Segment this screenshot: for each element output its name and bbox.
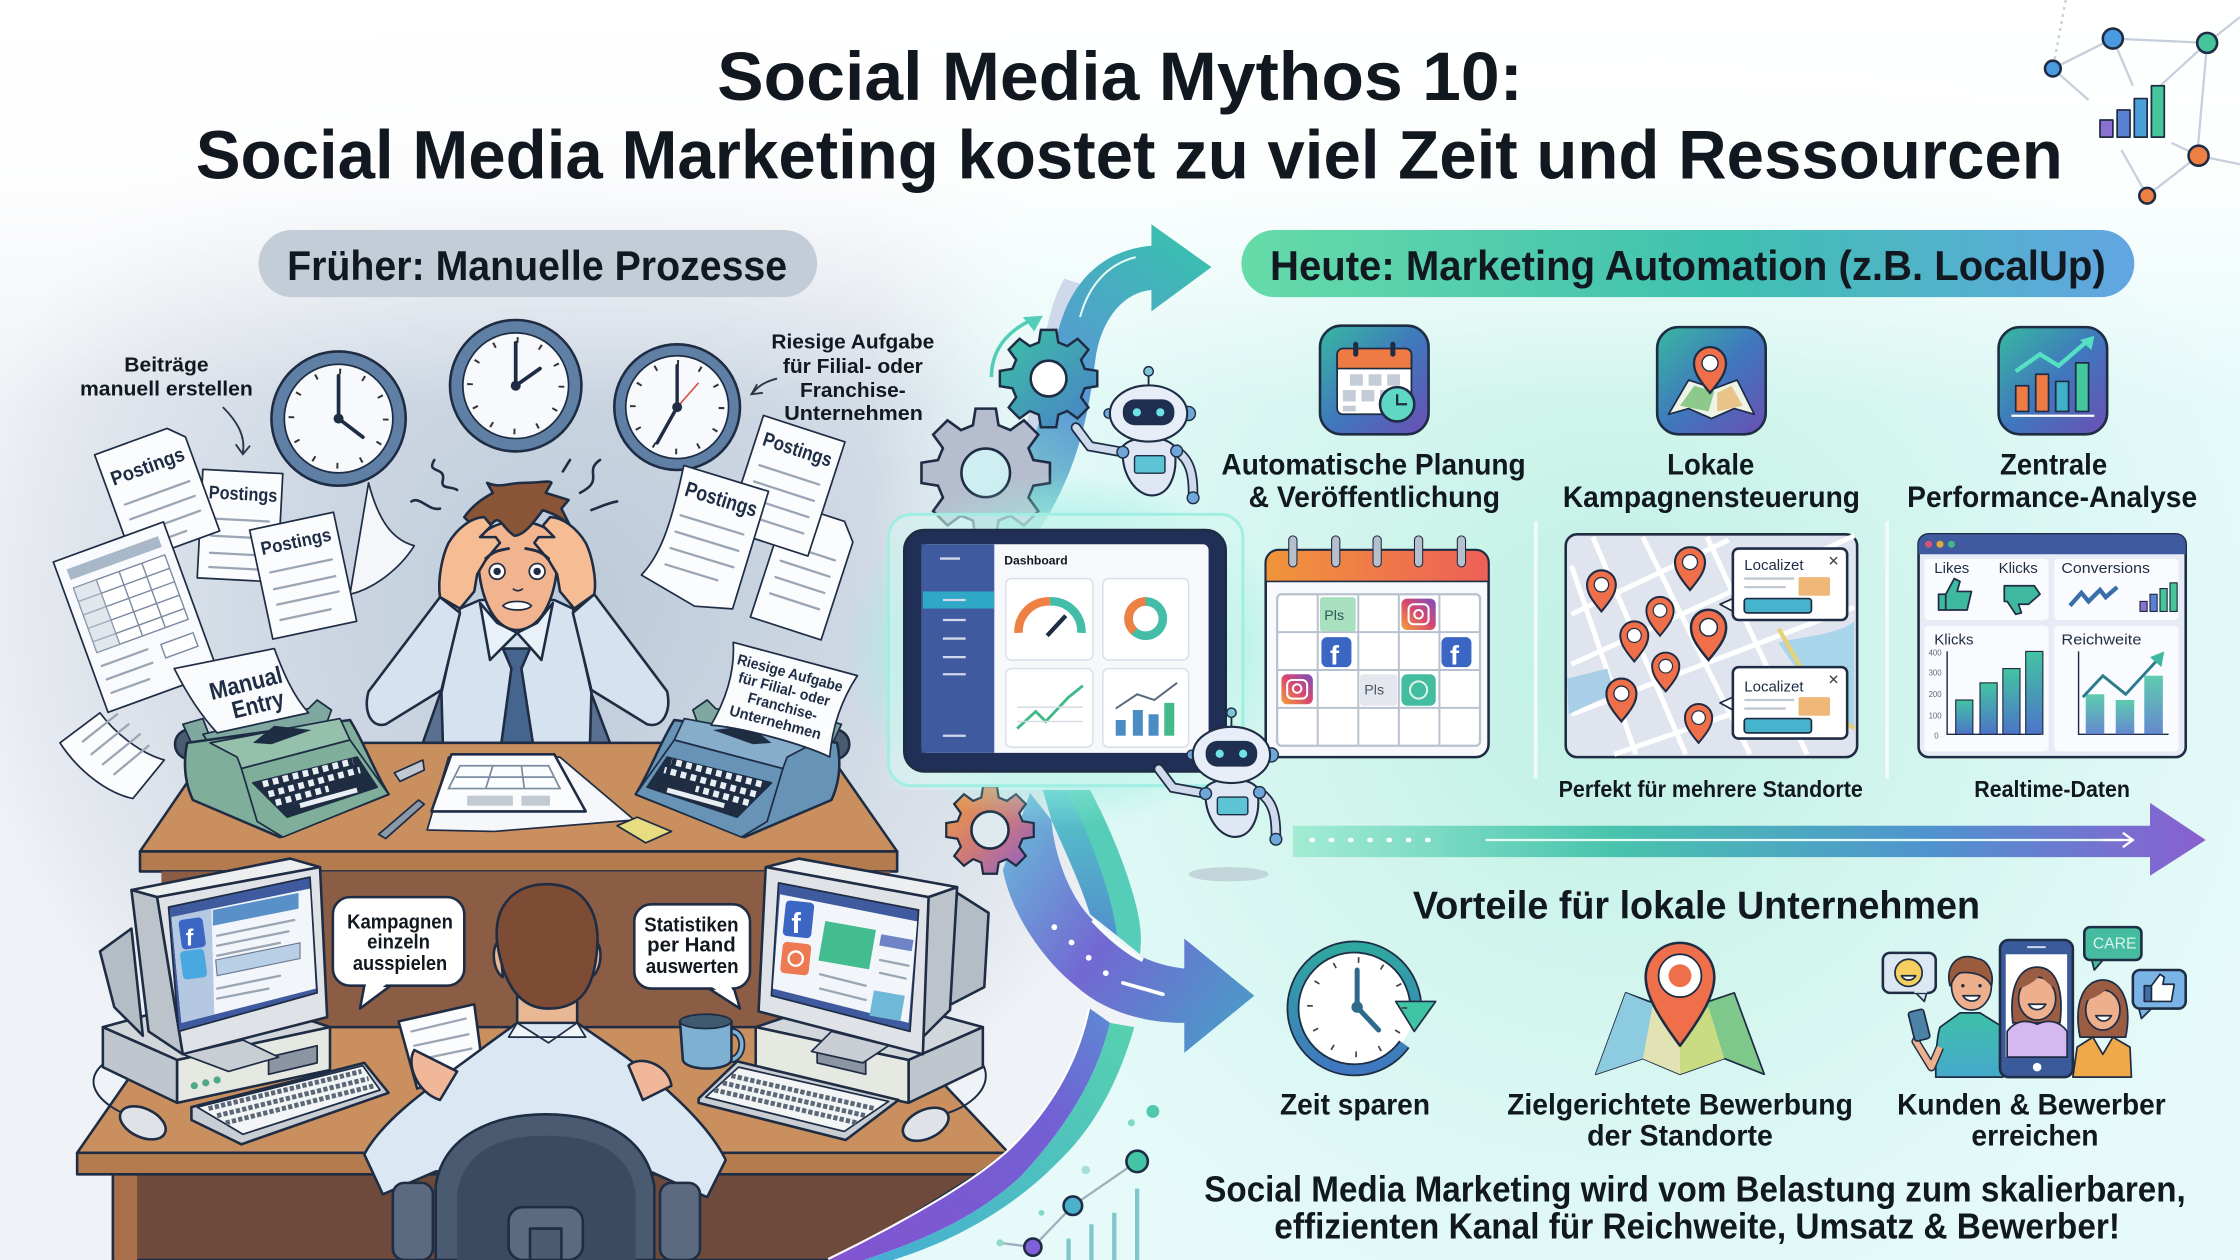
analytics panel: Likes	[1934, 560, 1969, 577]
stand	[183, 1040, 279, 1071]
keyboard	[191, 1063, 389, 1144]
heading: vorteile: Vorteile für lokale Unternehmen	[1413, 885, 1980, 928]
shirt	[364, 1023, 726, 1197]
document: postings 2	[197, 469, 283, 582]
feature headings: & Veröffentlichung	[1249, 481, 1500, 514]
speech bubble left: Kampagnen	[347, 912, 453, 934]
office chair	[393, 1114, 700, 1260]
hands	[411, 1050, 457, 1100]
analytics panel: Conversions	[2061, 560, 2150, 577]
analytics panel: 100	[1929, 712, 1942, 721]
icon: map	[1657, 327, 1766, 434]
gears	[921, 316, 1097, 874]
paper: riesige aufgabe: Unternehmen	[728, 702, 823, 743]
monitor	[131, 859, 320, 897]
neck	[517, 986, 577, 1031]
heading pill: früher	[259, 230, 817, 297]
feature headings: Performance-Analyse	[1907, 481, 2197, 514]
left arm	[367, 597, 460, 725]
popup: upper: Localizet	[1744, 557, 1804, 574]
feature headings: Zentrale	[2000, 448, 2107, 481]
speech bubble right: per Hand	[647, 934, 736, 956]
analytics panel: 400	[1929, 649, 1942, 658]
caption: perfekt für mehrere standorte: Perfekt für mehrere Standorte	[1559, 776, 1863, 802]
chair sides	[423, 690, 610, 743]
head	[497, 884, 597, 1009]
clock centre	[450, 320, 581, 451]
collar	[480, 603, 553, 660]
paper: manual entry: Entry	[229, 686, 287, 725]
paper in hand	[399, 1004, 483, 1089]
benefit captions: Zeit sparen	[1280, 1088, 1430, 1121]
heading pill: heute: Heute: Marketing Automation (z.B. LocalUp)	[1270, 243, 2106, 289]
woman centre	[2007, 967, 2067, 1057]
paper: riesige aufgabe	[711, 642, 857, 758]
network graphic top right	[2045, 0, 2240, 204]
annotation: riesige aufgabe: für Filial- oder	[783, 355, 923, 378]
popup: lower: Localizet	[1744, 678, 1804, 695]
document: postings 3	[250, 512, 357, 639]
annotation: riesige aufgabe: Riesige Aufgabe	[771, 331, 934, 354]
face	[478, 521, 557, 630]
speech bubble left: ausspielen	[353, 953, 447, 975]
paper: manual entry	[174, 649, 309, 733]
upper desk	[140, 743, 897, 871]
left hand	[439, 517, 500, 609]
document: plain	[750, 503, 858, 640]
mug	[680, 1014, 742, 1069]
annotation: beiträge manuell erstellen: Beiträge	[124, 353, 209, 376]
tie	[501, 649, 533, 743]
right arm	[573, 594, 668, 725]
calendar panel: f	[1330, 639, 1340, 670]
hair	[464, 482, 570, 536]
document: postings 1: Postings	[108, 444, 188, 491]
stressed man	[367, 482, 668, 743]
icon: people	[1883, 927, 2186, 1077]
conclusion text	[1204, 1169, 2186, 1247]
clock left	[271, 351, 406, 486]
lower swoosh arrow	[1003, 793, 1254, 1053]
calendar panel: Pls	[1364, 682, 1384, 698]
typewriter blue	[636, 700, 849, 837]
gear: orange purple	[946, 786, 1034, 874]
document: postings 5: Postings	[682, 477, 760, 522]
popup: upper	[1720, 549, 1847, 620]
thumbs icons	[1939, 579, 2040, 614]
base box	[103, 993, 330, 1103]
document: postings 1	[95, 424, 220, 562]
document: loose	[60, 713, 164, 799]
computer left	[94, 859, 389, 1146]
desk papers	[379, 754, 671, 843]
benefit captions	[1280, 1088, 2166, 1153]
document: postings 2: Postings	[208, 481, 278, 506]
man from behind	[364, 884, 726, 1197]
clock right	[614, 344, 740, 470]
analytics panel	[1919, 534, 2186, 757]
typewriter green	[175, 700, 389, 837]
base box	[756, 993, 983, 1103]
title: Social Media Mythos 10:	[717, 38, 1523, 115]
analytics panel: Reichweite	[2061, 631, 2141, 648]
upper bands behind tablet	[1043, 790, 1141, 954]
paper stack left	[53, 424, 357, 799]
wall behind lower desk	[161, 871, 890, 1031]
conclusion text: effizienten Kanal für Reichweite, Umsatz & Bewerber!	[1274, 1207, 2120, 1247]
bubble smiley	[1883, 953, 1936, 1001]
title	[196, 38, 2063, 194]
lower desk	[77, 1027, 1009, 1260]
phone	[2000, 940, 2073, 1077]
monitor casing	[946, 893, 989, 1007]
monitor casing	[100, 929, 143, 1036]
paper: riesige aufgabe: für Filial- oder	[736, 669, 832, 710]
heading pill: früher: Früher: Manuelle Prozesse	[287, 243, 787, 289]
curled paper behind	[350, 483, 414, 594]
computer left: f	[186, 925, 194, 951]
document: postings 4: Postings	[760, 429, 835, 472]
feature headings	[1221, 448, 2197, 514]
computer right: f	[791, 908, 801, 940]
heading pill: heute	[1241, 230, 2134, 297]
benefit captions: Zielgerichtete Bewerbung	[1507, 1088, 1853, 1121]
annotation: beiträge manuell erstellen: manuell erstellen	[80, 378, 253, 401]
calendar panel: f	[1450, 639, 1460, 670]
speech bubble right: Statistiken	[644, 914, 739, 936]
torso	[441, 600, 591, 743]
benefit captions: erreichen	[1971, 1120, 2099, 1153]
speech bubble right	[634, 904, 750, 1009]
upper swoosh arrow	[986, 224, 1211, 536]
analytics panel: 0	[1934, 732, 1939, 741]
tablet dashboard	[843, 471, 1286, 829]
document: postings 3: Postings	[259, 524, 333, 559]
small network chart bottom	[996, 1105, 1159, 1260]
analytics panel: 200	[1929, 690, 1942, 699]
paper: riesige aufgabe: Riesige Aufgabe	[735, 651, 845, 696]
analytics panel: 300	[1929, 669, 1942, 678]
robot bottom	[1159, 708, 1282, 881]
analytics panel: Klicks	[1999, 560, 2038, 577]
paper: riesige aufgabe: Franchise-	[746, 690, 819, 725]
benefit captions: der Standorte	[1587, 1120, 1773, 1153]
popup: lower	[1720, 667, 1847, 739]
calendar panel	[1266, 540, 1489, 757]
analytics panel: Klicks	[1934, 631, 1973, 648]
conclusion text: Social Media Marketing wird vom Belastung zum skalierbaren,	[1204, 1169, 2186, 1209]
dashboard label: Dashboard	[1004, 553, 1068, 567]
progress arrow	[1293, 803, 2206, 876]
speech bubble right: auswerten	[646, 956, 739, 978]
annotation: beiträge manuell erstellen	[80, 353, 253, 454]
annotation: riesige aufgabe: Unternehmen	[784, 402, 923, 425]
paper stack right	[637, 415, 858, 640]
document: postings 5	[637, 463, 769, 617]
calendar panel: Pls	[1324, 608, 1344, 624]
stress marks	[411, 460, 617, 510]
benefit captions: Kunden & Bewerber	[1897, 1088, 2166, 1121]
caption: realtime-daten: Realtime-Daten	[1974, 776, 2130, 802]
map panel	[1566, 534, 1857, 757]
stand	[811, 1031, 889, 1063]
annotation: riesige aufgabe	[751, 331, 934, 425]
bubble care: CARE	[2093, 936, 2136, 953]
icon: chart	[1999, 327, 2107, 434]
speech bubble left	[333, 897, 464, 1009]
icon: clock with arrow	[1293, 947, 1436, 1070]
dividers	[1536, 521, 1887, 779]
gear: grey	[921, 409, 1050, 537]
ears	[494, 940, 601, 977]
speech bubble left: einzeln	[367, 932, 430, 954]
gear: teal	[1000, 330, 1097, 427]
icon: calendar	[1320, 326, 1429, 434]
computer right	[699, 859, 989, 1147]
keyboard	[699, 1061, 899, 1140]
man left	[1908, 957, 2003, 1077]
annotation: riesige aufgabe: Franchise-	[800, 379, 906, 402]
feature headings: Automatische Planung	[1221, 448, 1526, 481]
mouse	[898, 1064, 986, 1147]
lower curved band	[829, 1009, 1134, 1260]
facial features	[486, 549, 549, 610]
feature headings: Kampagnensteuerung	[1563, 481, 1860, 514]
robot top	[1076, 367, 1199, 504]
monitor	[766, 859, 957, 897]
bubble care	[2084, 927, 2141, 970]
bubble like	[2133, 970, 2186, 1019]
title: Social Media Marketing kostet zu viel Zeit und Ressourcen	[196, 117, 2063, 194]
paper: manual entry: Manual	[207, 662, 285, 706]
document: postings 4	[726, 415, 845, 556]
spreadsheet	[53, 522, 218, 712]
woman right	[2073, 980, 2131, 1077]
mouse	[94, 1064, 171, 1146]
feature headings: Lokale	[1667, 448, 1754, 481]
right hand	[534, 517, 595, 609]
icon: map with pin	[1596, 943, 1764, 1074]
